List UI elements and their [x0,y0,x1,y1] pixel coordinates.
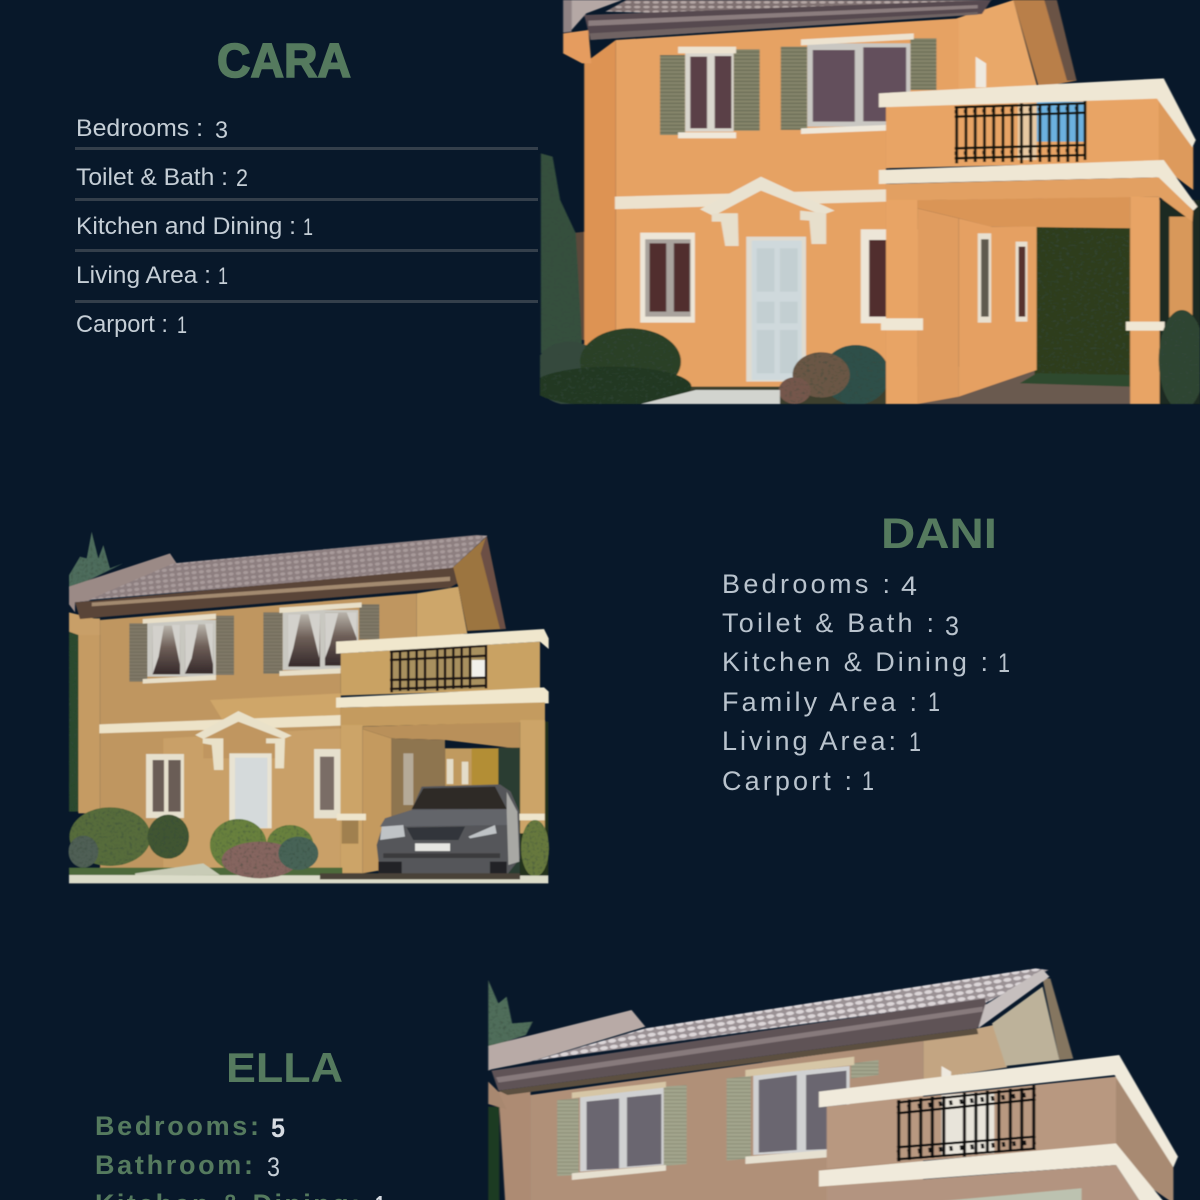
left bushes [532,328,692,407]
spec list: Dani: 1 [862,766,874,796]
panel: Ella [95,968,1178,1200]
lower centre window [860,228,887,324]
illustration: Ella house [488,968,1178,1200]
right bush [521,820,549,877]
spec list: Cara: 1 [218,263,228,290]
sunlit wall patches [163,693,341,868]
left pilaster [488,1082,531,1200]
upper left window [129,614,234,684]
spec list: Ella: 3 [267,1152,280,1182]
left bushes [68,807,189,868]
roof [563,0,992,40]
panel: Cara [75,0,1200,410]
spec list: Dani [722,569,1010,796]
door [229,753,272,828]
carport interior [918,197,1200,404]
balcony cream mouldings [879,78,1197,211]
upper right window [263,602,379,676]
spec list: Dani: Bedrooms : [722,569,890,599]
illustration: Dani house [68,532,549,883]
spec list: Cara: Bedrooms : [76,115,203,142]
roof [488,968,1049,1095]
balcony cream mouldings [819,1055,1178,1200]
spec list: Dani: 1 [998,648,1010,678]
carport interior [363,722,548,878]
centre shrubs [210,819,318,878]
spec list: Dani: 1 [928,687,940,717]
door [746,237,806,382]
walkway [641,390,780,404]
spec list: Dani: Family Area : [722,687,917,717]
railing [897,1085,1036,1161]
upper left window [660,47,760,138]
balcony wall [827,1077,1116,1168]
railing window behind [1018,102,1085,160]
spec list: Cara: Kitchen and Dining : [76,213,296,240]
pediment [195,711,292,770]
left pilaster [69,612,100,813]
right bush [1159,310,1200,410]
roof [69,535,487,619]
spec list: Dani: 3 [945,611,959,641]
band [615,189,886,209]
main wall [100,593,417,868]
spec list: Ella: Bedrooms: [95,1111,259,1141]
upper right window [781,33,936,134]
spec list: Cara: Toilet & Bath : [76,164,228,191]
spec list: Cara: 3 [215,117,228,144]
gable wall and soffit [417,535,506,640]
gable wall and trim [957,0,1077,92]
car [377,784,520,875]
spec list: Ella [95,1111,385,1200]
spec list: Dani: Living Area: [722,726,896,756]
lower left window [640,233,695,323]
spec list: Cara: 2 [236,165,248,192]
beam [341,702,545,727]
main wall [531,1040,923,1200]
spec list: Dani: 1 [909,727,921,757]
spec list: Dani: Kitchen & Dining : [722,647,988,677]
centre shrub [779,345,889,405]
background tree [69,532,123,812]
beam [886,177,1193,222]
balcony cream mouldings [336,629,549,708]
spec list: Cara: 1 [177,312,187,339]
back right pillar [1169,217,1192,323]
right pillar [517,720,545,833]
spec list: Cara [75,115,538,339]
railing [390,645,487,692]
band [99,715,341,733]
heading: CARA: CARA [217,35,351,88]
spec list: Cara: Carport : [76,311,168,338]
lower left window [146,754,184,818]
right window [727,1057,879,1164]
spec list: Dani: Toilet & Bath : [722,608,934,638]
gable wall and soffit [923,978,1073,1080]
front left pillar [881,200,923,404]
spec list: Dani: Carport : [722,766,852,796]
balcony side [1158,97,1193,190]
ground [69,863,548,883]
ground strip [582,387,889,404]
lower beam and carport [827,1165,1141,1200]
railing [955,101,1086,163]
main wall [616,18,959,397]
front right pillar [1126,197,1165,404]
balcony wall [886,97,1159,168]
spec list: Dani: 4 [901,571,917,601]
pediment [700,177,835,246]
balcony side [1116,1077,1173,1200]
heading: ELLA: ELLA [226,1044,343,1091]
spec list: Ella: 5 [271,1113,285,1143]
spec list: Cara: 1 [303,214,313,241]
heading: DANI: DANI [881,510,997,558]
left pillar [337,725,366,873]
spec list: Ella: Bathroom: [95,1150,253,1180]
background tree [488,980,533,1200]
panel: Dani [68,510,1010,883]
illustration: Cara house [532,0,1200,410]
left window [557,1082,687,1180]
balcony wall [341,642,540,696]
lower centre window [314,749,341,818]
spec list: Cara: Living Area : [76,262,211,289]
tree and fence at left [541,153,586,353]
left pilaster [563,30,616,347]
